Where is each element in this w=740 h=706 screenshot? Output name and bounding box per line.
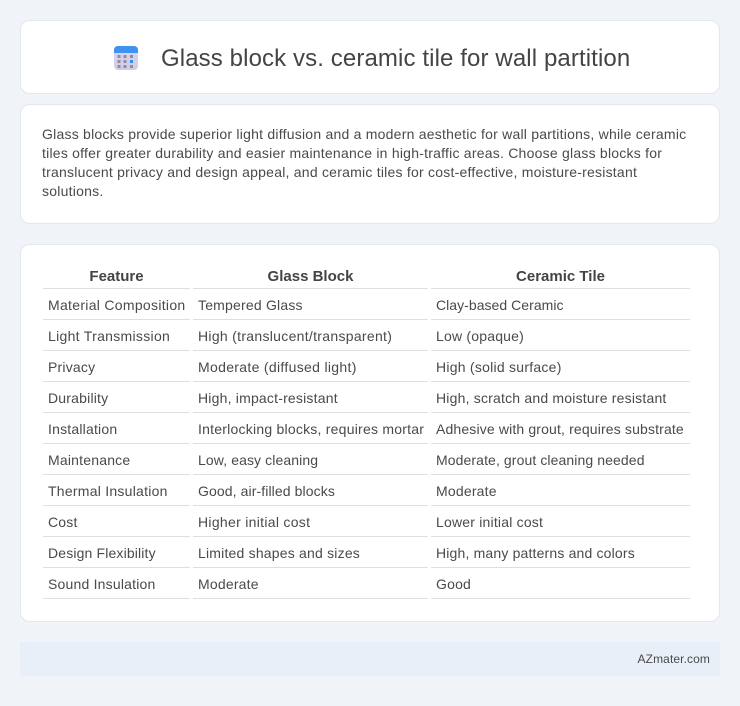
header row: Glass Block bbox=[268, 268, 353, 285]
row: Thermal Insulation bbox=[48, 483, 497, 499]
row: Maintenance: Maintenance bbox=[48, 452, 130, 468]
row: Material Composition: Clay-based Ceramic bbox=[436, 297, 564, 313]
row: Design Flexibility: Design Flexibility bbox=[48, 545, 156, 561]
row: Design Flexibility bbox=[48, 545, 635, 561]
summary text: translucent privacy and design appeal, and ceramic tiles for cost-effective, moisture-resistant bbox=[42, 164, 637, 180]
row: Light Transmission: Low (opaque) bbox=[436, 328, 524, 344]
row: Installation bbox=[48, 421, 684, 437]
row: Cost: Cost bbox=[48, 514, 78, 530]
row: Cost: Higher initial cost bbox=[198, 514, 310, 530]
row: Thermal Insulation: Moderate bbox=[436, 483, 497, 499]
footer credit: AZmater.com bbox=[638, 652, 710, 666]
summary text: solutions. bbox=[42, 183, 103, 199]
summary text bbox=[42, 126, 686, 199]
row: Cost: Lower initial cost bbox=[436, 514, 543, 530]
row: Light Transmission: High (translucent/transparent) bbox=[198, 328, 392, 344]
summary text: Glass blocks provide superior light diffusion and a modern aesthetic for wall partitions, while ceramic bbox=[42, 126, 686, 142]
header row bbox=[89, 268, 605, 285]
footer bar bbox=[20, 642, 720, 676]
row: Sound Insulation bbox=[48, 576, 471, 592]
header row: Ceramic Tile bbox=[516, 268, 605, 285]
row: Durability: High, impact-resistant bbox=[198, 390, 338, 406]
row: Material Composition: Material Composition bbox=[48, 297, 186, 313]
row: Durability: High, scratch and moisture resistant bbox=[436, 390, 667, 406]
row: Maintenance: Low, easy cleaning bbox=[198, 452, 318, 468]
row: Installation: Installation bbox=[48, 421, 117, 437]
summary text: tiles offer greater durability and easier maintenance in high-traffic areas. Choose glass blocks for bbox=[42, 145, 662, 161]
row: Durability: Durability bbox=[48, 390, 108, 406]
row: Design Flexibility: High, many patterns and colors bbox=[436, 545, 635, 561]
row: Sound Insulation: Sound Insulation bbox=[48, 576, 156, 592]
row: Installation: Interlocking blocks, requires mortar bbox=[198, 421, 424, 437]
row: Light Transmission bbox=[48, 328, 524, 344]
row: Privacy bbox=[48, 359, 562, 375]
row: Durability bbox=[48, 390, 667, 406]
row: Privacy: Moderate (diffused light) bbox=[198, 359, 357, 375]
comparison table bbox=[43, 268, 690, 599]
row: Sound Insulation: Moderate bbox=[198, 576, 259, 592]
row: Maintenance: Moderate, grout cleaning needed bbox=[436, 452, 645, 468]
row: Privacy: Privacy bbox=[48, 359, 95, 375]
icon: calendar grid bbox=[114, 46, 138, 70]
row: Sound Insulation: Good bbox=[436, 576, 471, 592]
panel: comparison table bbox=[20, 244, 720, 622]
panel: summary bbox=[20, 104, 720, 224]
row: Maintenance bbox=[48, 452, 645, 468]
row: Design Flexibility: Limited shapes and sizes bbox=[198, 545, 360, 561]
row: Light Transmission: Light Transmission bbox=[48, 328, 170, 344]
row: Material Composition bbox=[48, 297, 564, 313]
row: Installation: Adhesive with grout, requires substrate bbox=[436, 421, 684, 437]
row: Cost bbox=[48, 514, 543, 530]
row: Thermal Insulation: Good, air-filled blocks bbox=[198, 483, 335, 499]
header row: Feature bbox=[89, 268, 144, 285]
title: Glass block vs. ceramic tile for wall partition bbox=[161, 45, 630, 72]
panel: title card bbox=[20, 20, 720, 94]
row: Material Composition: Tempered Glass bbox=[198, 297, 303, 313]
row: Thermal Insulation: Thermal Insulation bbox=[48, 483, 168, 499]
row: Privacy: High (solid surface) bbox=[436, 359, 562, 375]
